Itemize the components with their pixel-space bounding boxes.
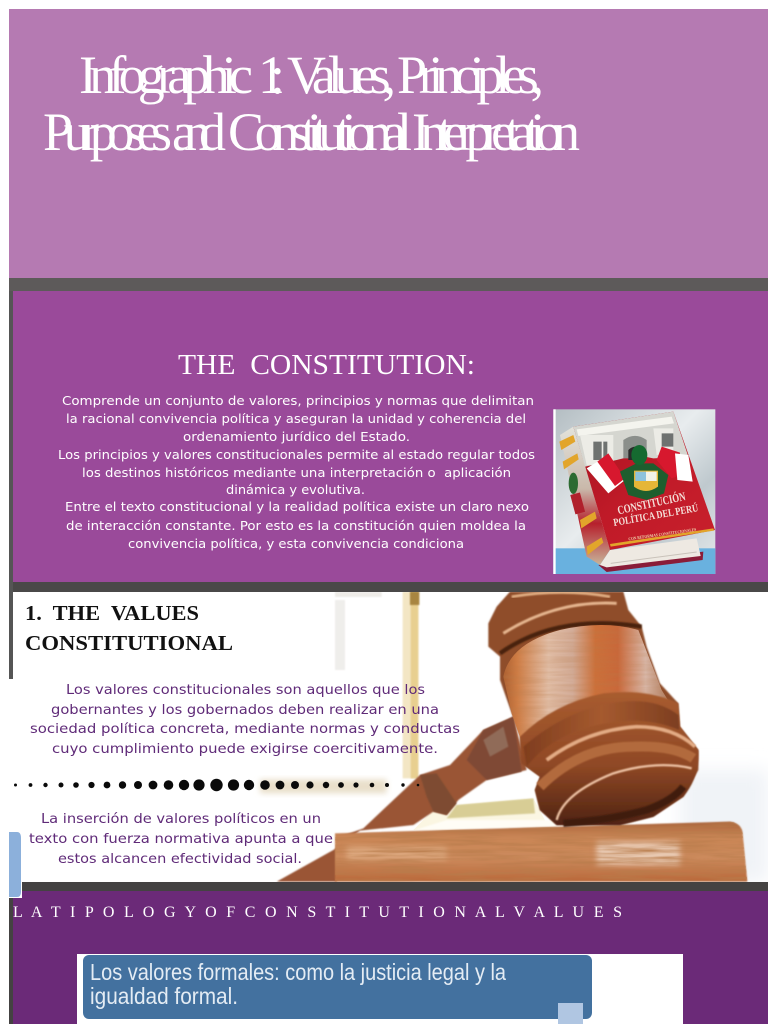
dark band above typology (22, 882, 768, 891)
text block: constitution description: convivencia política, y esta convivencia condiciona (128, 536, 464, 551)
icon: constitution book (553, 409, 715, 574)
text block: constitution description: Los principios y valores constitucionales permite al estado regular todos (58, 447, 535, 462)
text block: definition of constitutional values (30, 683, 460, 757)
text block: definition of constitutional values: Los valores constitucionales son aquellos que los (66, 683, 425, 698)
text block: constitution description: de interacción constante. Por esto es la constitución quien moldea la (66, 518, 526, 533)
panel: the values constitutional (9, 592, 766, 897)
text block: heading values constitutional (25, 601, 233, 655)
heading: the constitution: THE CONSTITUTION: (178, 350, 475, 381)
title: Infographic (79, 45, 253, 105)
text block: definition of constitutional values: gobernantes y los gobernados deben realizar en una (51, 703, 439, 718)
text block: constitution description: los destinos históricos mediante una interpretación o aplicación (82, 465, 511, 480)
title: Values, (287, 45, 396, 105)
heading: typology: L A T I P O L O G Y O F C O N S T I T U T I O N A L V A L U E S (13, 904, 622, 921)
text block: insertion of political values (29, 811, 333, 867)
title: 1: (258, 45, 285, 105)
small light square (558, 1003, 583, 1024)
panel: title (9, 9, 768, 278)
text block: constitution description: Comprende un conjunto de valores, principios y normas que delimitan (62, 393, 534, 408)
title (43, 45, 580, 162)
blue box: formal values: igualdad formal. (90, 983, 238, 1009)
text block: definition of constitutional values: cuyo cumplimiento puede exigirse coercitivamente. (52, 742, 438, 757)
text block: constitution description: Entre el texto constitucional y la realidad política existe un claro nexo (65, 499, 529, 514)
title: Constitutional (228, 102, 412, 162)
panel: typology of constitutional values (9, 891, 768, 1024)
text block: constitution description (58, 393, 535, 551)
icon: constitution book: CON REFORMAS CONSTITUCIONALES (628, 527, 697, 541)
title: Principles, (397, 45, 544, 105)
image: gavel on sounding block (260, 592, 748, 883)
dark band (9, 278, 768, 291)
dotted divider (14, 779, 419, 791)
title: and (172, 102, 226, 162)
text block: constitution description: la racional convivencia política y aseguran la unidad y coherencia del (66, 411, 526, 426)
text block: insertion of political values: La inserción de valores políticos en un (41, 811, 321, 827)
text block: heading values constitutional: CONSTITUTIONAL (25, 631, 233, 655)
blue box: formal values: Los valores formales: como la justicia legal y la (90, 959, 506, 985)
left strip (9, 291, 13, 679)
text block: constitution description: ordenamiento jurídico del Estado. (183, 429, 410, 444)
text block: heading values constitutional: 1. THE VALUES (25, 601, 199, 625)
title: Purposes (43, 102, 172, 162)
text block: constitution description: dinámica y evolutiva. (226, 482, 365, 497)
text block: insertion of political values: estos alcancen efectividad social. (58, 852, 302, 867)
blue box: formal values (83, 955, 592, 1019)
title: Interpretation (412, 102, 580, 162)
panel: the constitution (13, 291, 768, 582)
icon: constitution book: CONSTITUCIÓN (616, 489, 687, 517)
light blue tab (9, 832, 21, 897)
text block: definition of constitutional values: sociedad política concreta, mediante normas y conductas (30, 721, 460, 737)
icon: constitution book: POLÍTICA DEL PERÚ (612, 502, 699, 529)
text block: insertion of political values: texto con fuerza normativa apunta a que (29, 832, 333, 847)
white card (77, 954, 683, 1024)
